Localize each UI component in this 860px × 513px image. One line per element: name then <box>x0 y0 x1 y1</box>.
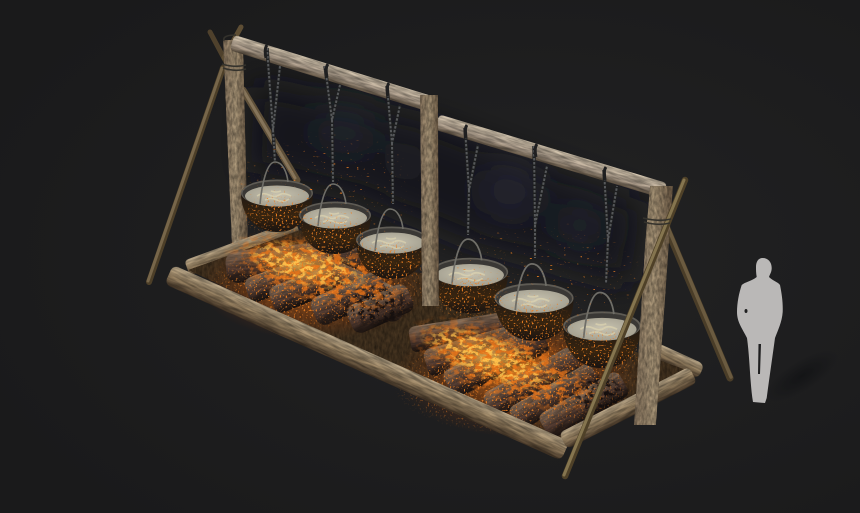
frame: front long log <box>165 265 570 461</box>
cauldron 2 <box>299 184 371 254</box>
right fire logs <box>408 312 631 440</box>
left post <box>223 40 248 248</box>
charred patches on logs <box>337 283 632 419</box>
person scale silhouette <box>737 258 783 403</box>
cauldron 5 <box>494 264 574 341</box>
rear brace stick, right <box>652 192 731 378</box>
beam, first span <box>230 35 437 113</box>
left fire logs <box>224 238 416 336</box>
right post <box>634 186 673 425</box>
cauldron 1 <box>241 162 313 232</box>
chains <box>265 45 617 283</box>
person scale shadow <box>758 341 846 411</box>
sparks in the air <box>225 128 655 342</box>
cauldron 3 <box>356 209 428 279</box>
rear brace sticks, left <box>148 27 297 282</box>
rope lashing, right post <box>643 218 671 224</box>
beam, second span <box>435 114 667 198</box>
frame: right side log <box>559 367 697 449</box>
smoke haze behind rack <box>250 85 640 285</box>
rope lashing, left post <box>222 35 246 70</box>
ground bed <box>188 230 692 442</box>
middle post <box>420 95 439 306</box>
sparks on cauldrons <box>205 193 644 435</box>
cauldron 6 <box>563 293 641 368</box>
front brace stick, right <box>564 180 685 476</box>
ground ember glow <box>200 230 645 437</box>
cauldron 4 <box>432 239 508 313</box>
flames <box>215 215 617 437</box>
frame: back logs <box>184 220 705 379</box>
